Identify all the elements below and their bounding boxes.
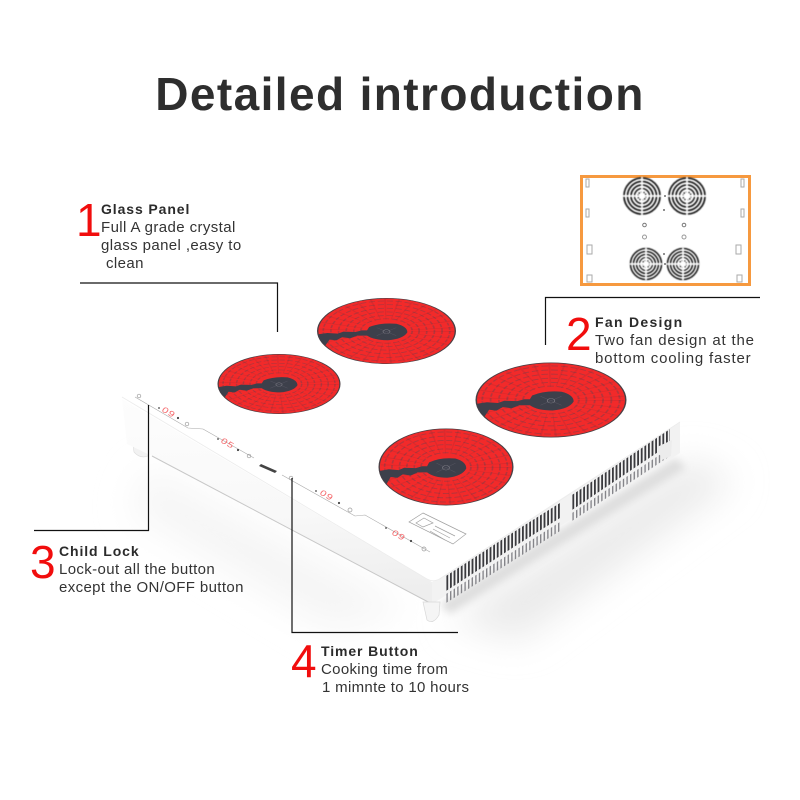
callout 3: child lock bbox=[30, 405, 244, 596]
control strip 1: 09 bbox=[317, 489, 335, 503]
control strip 1: 09 bbox=[389, 529, 407, 543]
description: fan design: bottom cooling faster bbox=[595, 350, 751, 367]
control strip 1: 05 bbox=[218, 437, 236, 451]
fan top right bbox=[668, 177, 706, 215]
heading: Glass Panel: Glass Panel bbox=[101, 201, 190, 217]
induction cooktop bbox=[122, 235, 735, 640]
fan top left bbox=[623, 177, 661, 215]
burner back bbox=[318, 298, 455, 364]
number 1: 1 bbox=[76, 194, 102, 246]
leader line 2 bbox=[546, 298, 760, 345]
leader line 4 bbox=[292, 478, 458, 632]
heading: Child Lock: Child Lock bbox=[59, 543, 140, 559]
description: child lock: Lock-out all the button bbox=[59, 561, 215, 578]
right side vents bbox=[446, 429, 670, 603]
right side wall bbox=[432, 422, 680, 604]
glass top surface bbox=[122, 235, 680, 581]
warning label bbox=[409, 513, 466, 544]
description: glass panel: Full A grade crystal bbox=[101, 219, 236, 236]
number 4: 4 bbox=[291, 635, 317, 687]
description: timer button: 1 mimnte to 10 hours bbox=[322, 679, 469, 696]
brand logo bbox=[259, 464, 277, 473]
number 3: 3 bbox=[30, 536, 56, 588]
description: glass panel: clean bbox=[106, 255, 144, 272]
heading: Timer Button: Timer Button bbox=[321, 643, 419, 659]
fan bottom right bbox=[667, 248, 699, 280]
callout 4: timer button bbox=[291, 478, 469, 696]
heading: Fan Design: Fan Design bbox=[595, 314, 683, 330]
title: Detailed introduction bbox=[155, 68, 645, 120]
description: glass panel: glass panel ,easy to bbox=[101, 237, 242, 254]
leader line 3 bbox=[34, 405, 148, 530]
number 2: 2 bbox=[566, 308, 592, 360]
control strip 1: 09 bbox=[159, 406, 177, 420]
left side wall bbox=[122, 399, 432, 604]
control strip 1 bbox=[135, 394, 430, 552]
foot front bbox=[423, 602, 440, 622]
leader line 1 bbox=[80, 283, 278, 332]
fan bottom left bbox=[630, 248, 662, 280]
description: fan design: Two fan design at the bbox=[595, 332, 755, 349]
burner front bbox=[379, 429, 513, 505]
foot right bbox=[657, 440, 672, 460]
burner right bbox=[476, 363, 626, 437]
cast shadow bbox=[130, 458, 735, 640]
fan design inset panel bbox=[582, 176, 750, 284]
callout 2: fan design bbox=[546, 298, 760, 367]
panel screws and brackets bbox=[586, 179, 744, 282]
foot back left bbox=[132, 438, 150, 457]
burner left bbox=[218, 354, 340, 414]
description: timer button: Cooking time from bbox=[321, 661, 448, 678]
callout 1: glass panel bbox=[76, 194, 278, 332]
description: child lock: except the ON/OFF button bbox=[59, 579, 244, 596]
